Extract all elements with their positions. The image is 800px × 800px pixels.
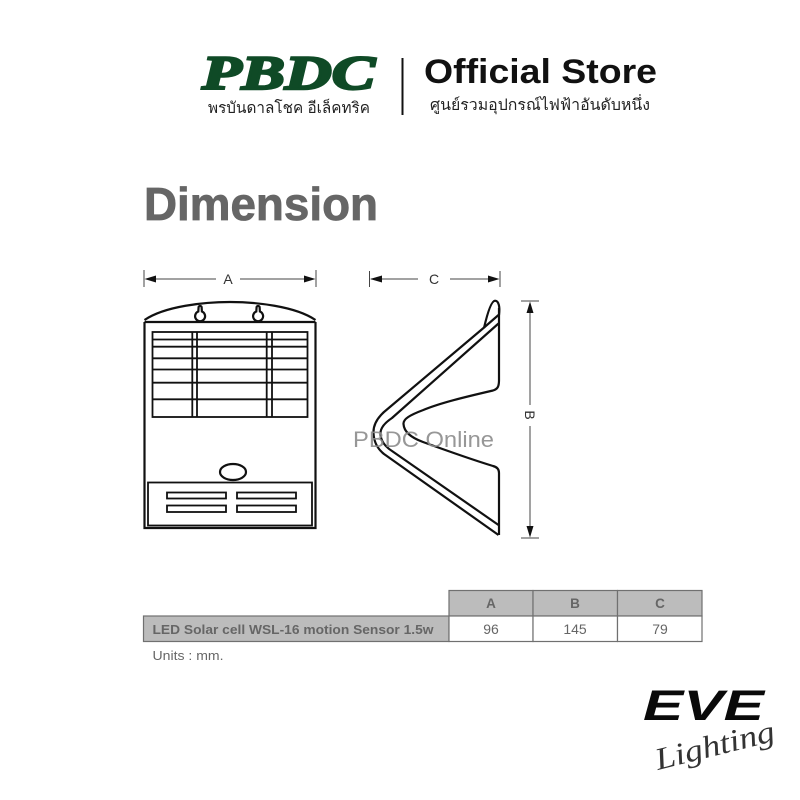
units note: Units : mm. — [152, 649, 224, 663]
heading: Official Store: Official Store — [424, 53, 657, 91]
solar panel — [152, 332, 308, 417]
logo: PBDC: PBDC — [201, 47, 376, 100]
outer shell — [373, 315, 498, 535]
dimension A — [144, 270, 316, 287]
body outline — [144, 302, 316, 528]
dimension C: C — [429, 271, 439, 287]
product row: 145 — [563, 621, 587, 637]
lower vent panel — [148, 482, 312, 526]
product row: 79 — [652, 621, 668, 637]
motion sensor — [220, 464, 246, 480]
dimension A: A — [223, 271, 233, 287]
inner shell — [380, 324, 498, 525]
watermark: PBDC Online — [353, 427, 494, 452]
header row: A — [486, 596, 496, 611]
side view drawing — [373, 301, 499, 535]
header row — [449, 590, 702, 616]
logo: PBDC — [201, 47, 376, 117]
icon: left keyhole — [195, 306, 205, 321]
product row: 96 — [483, 621, 499, 637]
dimension B — [521, 301, 539, 538]
logo: EVE Lighting — [643, 682, 778, 777]
logo: EVE Lighting: EVE — [643, 682, 766, 730]
product row: LED Solar cell WSL-16 motion Sensor 1.5w — [152, 622, 434, 637]
title: Dimension: Dimension — [144, 178, 378, 230]
mounting ear — [484, 301, 499, 328]
header row: C — [655, 596, 665, 611]
header logos — [201, 47, 657, 117]
dimension B: B — [522, 410, 538, 420]
dimension C — [370, 271, 500, 287]
icon: right keyhole — [253, 306, 263, 321]
divider — [402, 58, 404, 115]
product row — [144, 616, 702, 642]
front view drawing — [144, 302, 316, 528]
back edge — [403, 308, 499, 535]
header row: B — [570, 596, 580, 611]
logo: PBDC: พรบันดาลโชค อีเล็คทริค — [208, 98, 370, 117]
subheading: ศูนย์รวมอุปกรณ์ไฟฟ้าอันดับหนึ่ง — [430, 94, 650, 115]
dimension table — [144, 590, 702, 642]
logo: EVE Lighting: Lighting — [650, 713, 778, 777]
